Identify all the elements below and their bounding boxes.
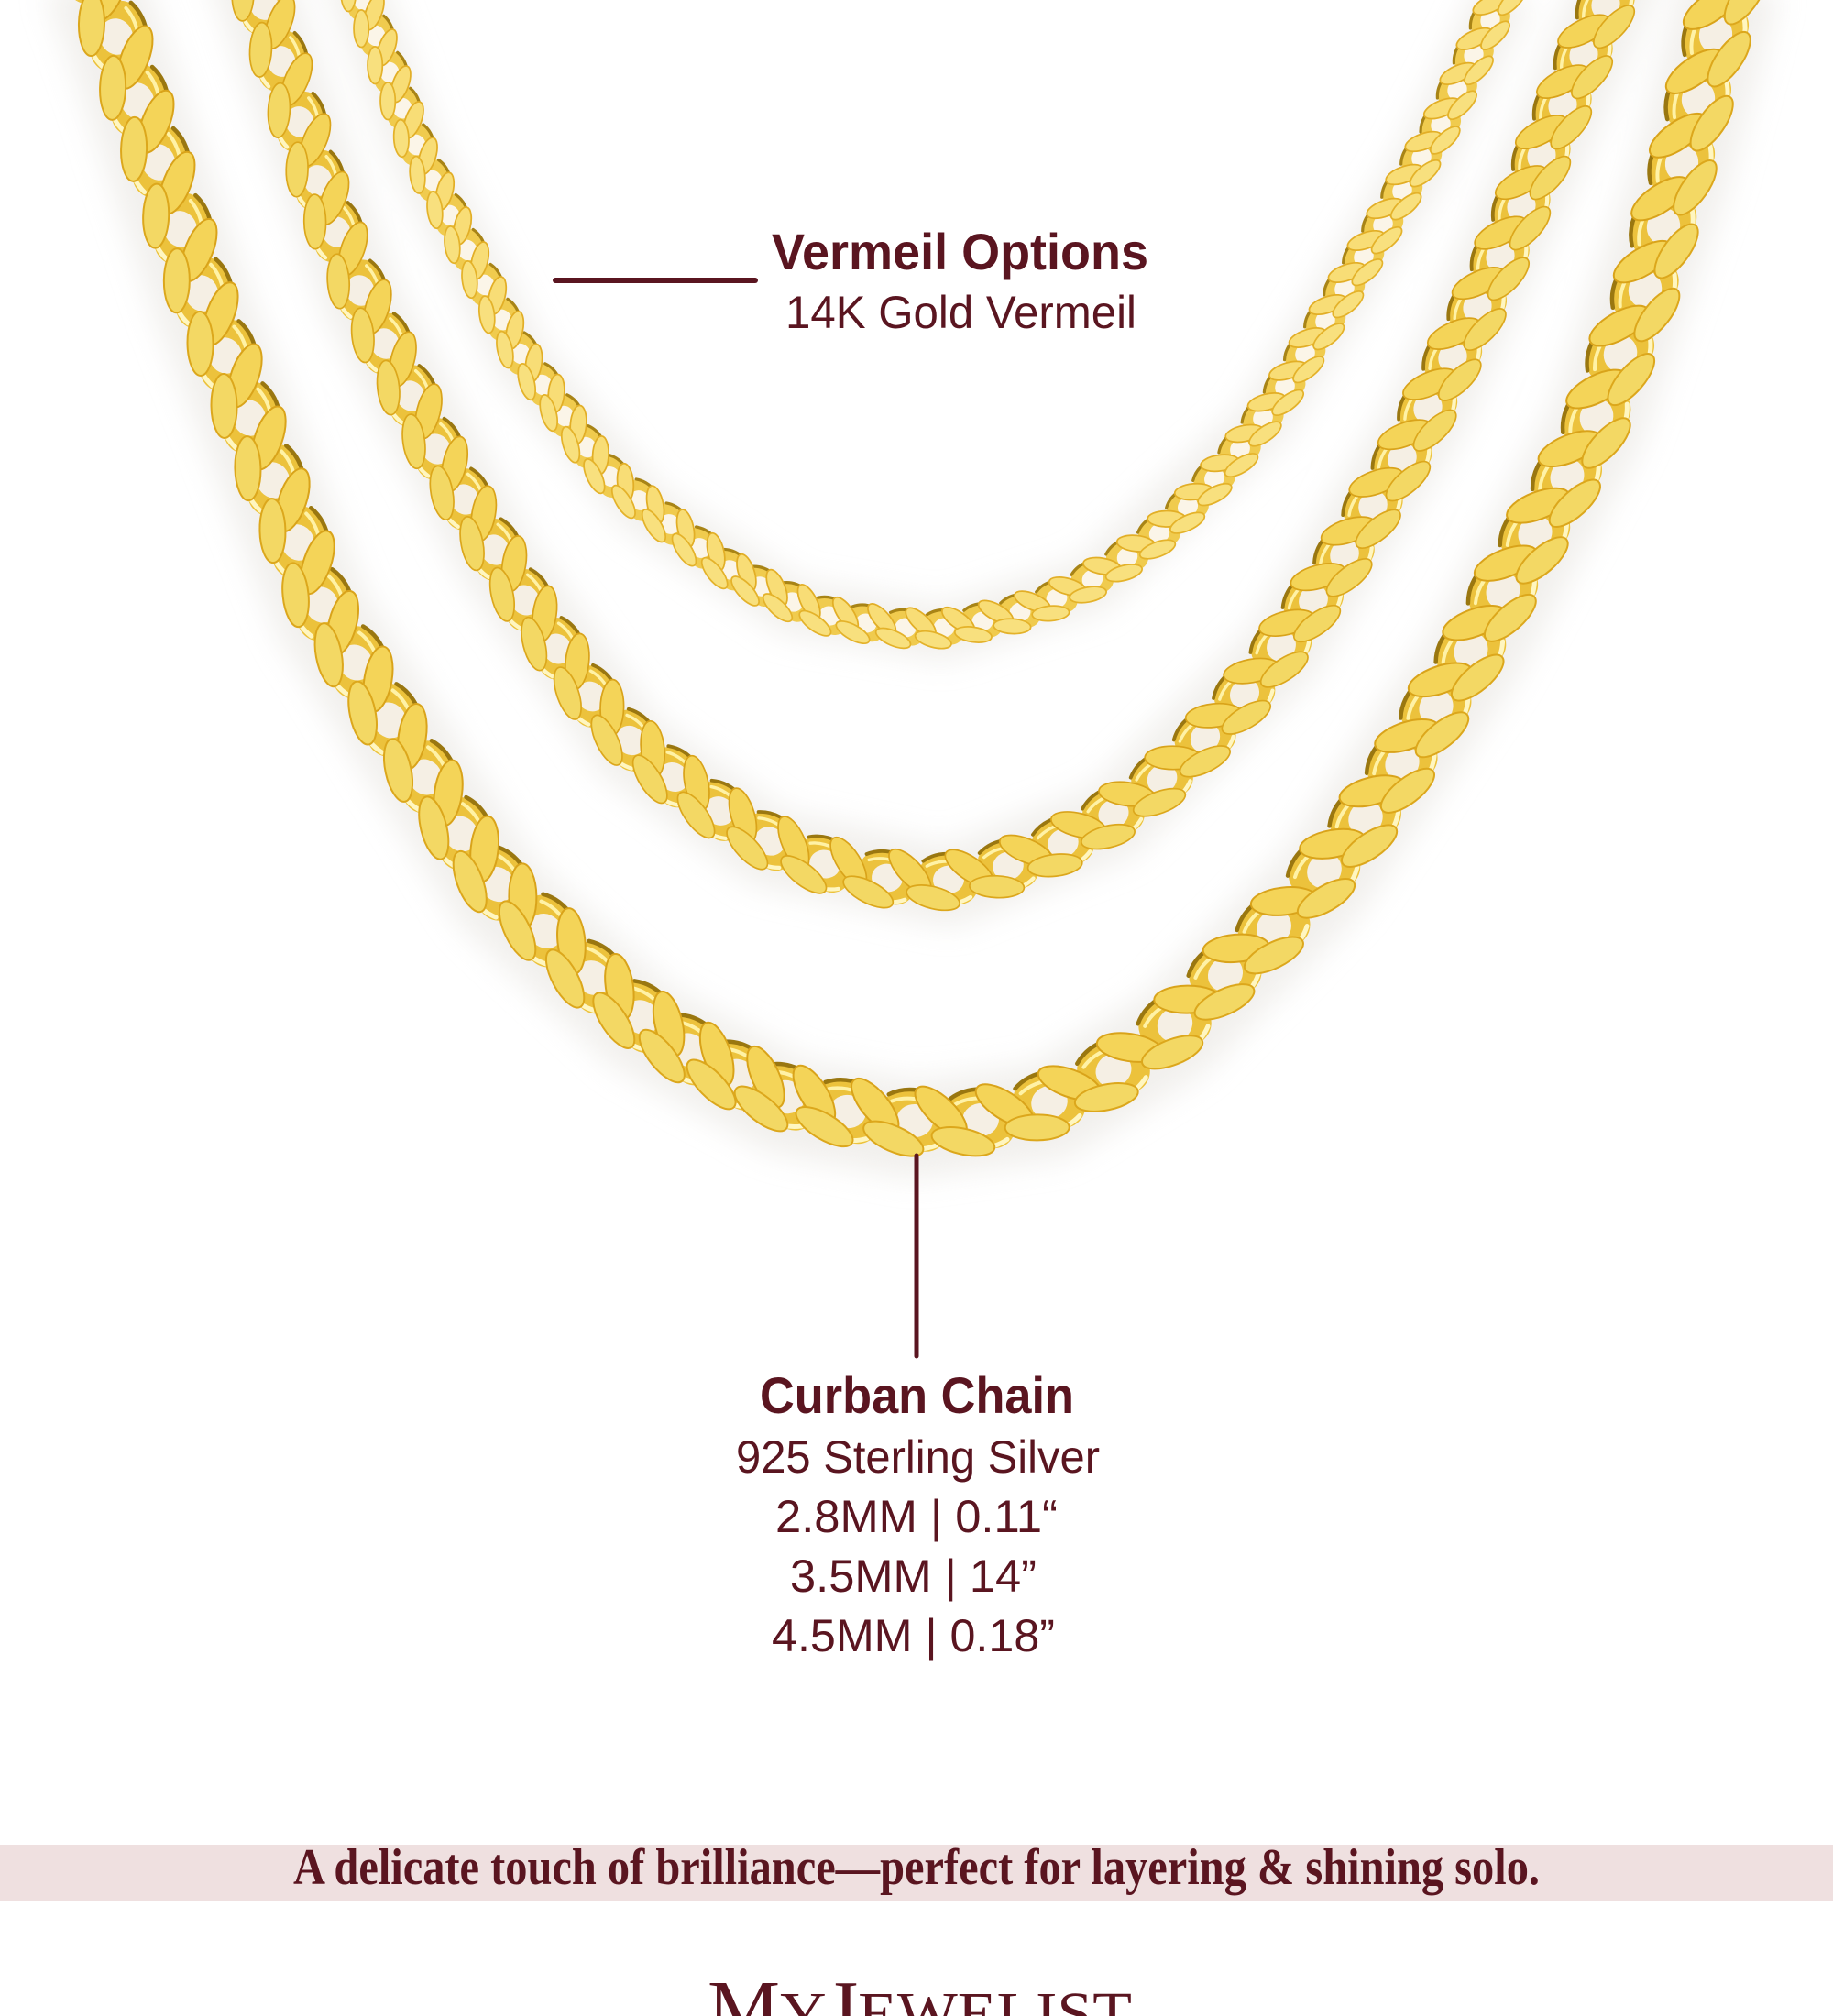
heading: Curban Chain: Curban Chain <box>760 1366 1074 1424</box>
text: size 3.5mm: 3.5MM | 14” <box>790 1550 1037 1602</box>
text: size 4.5mm: 4.5MM | 0.18” <box>772 1610 1055 1661</box>
necklace: outer chain <box>71 0 1749 1121</box>
callout: vermeil options <box>772 223 1148 338</box>
leader line: curban chain <box>915 1156 918 1356</box>
text: tagline: A delicate touch of brilliance—perfect for layering & shining solo. <box>293 1839 1540 1896</box>
banner: tagline band <box>0 1839 1833 1901</box>
necklace: inner vermeil chain <box>349 0 1521 628</box>
callout: curban chain specifications <box>736 1366 1100 1661</box>
text: material: 925 Sterling Silver <box>736 1431 1100 1483</box>
necklace: middle chain <box>243 0 1650 880</box>
heading: Vermeil Options: Vermeil Options <box>772 223 1148 280</box>
text: size 2.8mm: 2.8MM | 0.11“ <box>775 1491 1058 1542</box>
leader line: vermeil options <box>555 278 755 283</box>
text: 14K Gold Vermeil: 14K Gold Vermeil <box>785 287 1136 338</box>
